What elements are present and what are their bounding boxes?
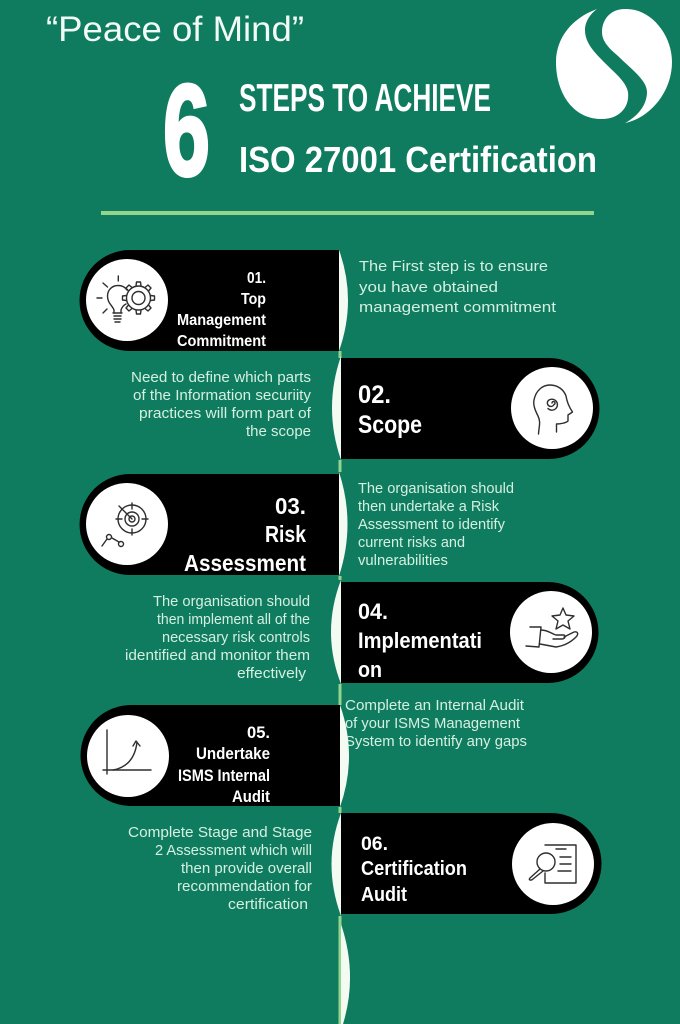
step 5 title: Undertake [196,744,270,763]
title: peace of mind: “Peace of Mind” [46,10,304,49]
heading: steps to achieve: STEPS TO ACHIEVE [239,77,491,120]
step 1 title [177,270,267,350]
icon: head with spiral [534,385,572,434]
step 5 icon badge [87,715,169,797]
step 2 title: 02. [358,381,391,409]
step 4 pill [341,582,598,683]
step 6 title: Audit [361,884,407,906]
step 6 description: recommendation for [177,878,312,895]
icon: lightbulb and gear [97,276,154,322]
step 3 icon badge [86,483,168,565]
step 2 icon badge [511,367,593,449]
step 2 pill [341,358,599,459]
step 4 description: identified and monitor them [125,647,310,664]
step 5 description: of your ISMS Management [345,715,521,732]
step 4 description: The organisation should [153,593,310,610]
step 6 divider lens [332,813,341,916]
step 2 title: Scope [358,411,422,439]
step 2 divider lens [332,356,341,460]
step 3 description: Assessment to identify [358,516,505,533]
step 5 title: 05. [247,723,270,742]
step 1 description: The First step is to ensure [359,258,548,275]
step 6 description [128,824,312,913]
step 6 description: 2 Assessment which will [155,842,312,859]
step 4 description: effectively [237,665,307,682]
step 4 icon badge [510,591,592,673]
step 5 divider lens [340,705,349,807]
icon: target and trend [102,503,148,546]
step 2 title [358,381,422,439]
step 5 title [178,723,270,806]
step 2 description [131,369,312,440]
step 1 icon badge [86,259,168,341]
icon: magnifier over document [529,845,576,883]
step 1 title: 01. [247,270,266,287]
step 3 description: current risks and [358,534,465,551]
heading: ISO 27001 certification: ISO 27001 Certification [239,139,597,180]
step 4 title: Implementati [358,628,482,653]
icon: growth chart [103,730,151,774]
step 4 title: 04. [358,599,388,624]
step 6 title: 06. [361,834,388,855]
step 3 title: Assessment [184,550,306,576]
header divider [101,211,594,215]
icon: hand with star [526,608,578,647]
step 3 divider lens [339,472,348,576]
step 3 pill [80,474,339,575]
step 6 pill [341,813,602,914]
step 4 description [125,593,310,682]
step 2 description: the scope [246,423,311,440]
step 5 pill [80,705,340,806]
step 1 description: you have obtained [359,279,498,296]
step 2 description: of the Information securiity [133,387,311,404]
step 6 icon badge [512,823,594,905]
panel: step 2 [332,356,599,460]
step 5 description: System to identify any gaps [345,733,527,750]
panel: step 1 [80,250,348,351]
step 1 pill [80,250,339,351]
step 3 description: The organisation should [358,480,514,497]
step 3 description [358,480,514,569]
step 1 description [359,258,557,316]
step 3 description: vulnerabilities [358,552,448,569]
logo [556,9,672,123]
step 5 title: ISMS Internal [178,766,270,785]
step 1 divider lens [339,250,348,351]
step 1 title: Management [177,312,267,329]
step 6 description: certification [228,896,308,913]
step 4 divider lens [331,580,341,684]
step 4 title: on [358,657,382,682]
step 1 description: management commitment [359,299,557,316]
step 5 description [345,697,527,750]
step 4 title [358,599,482,682]
bottom timeline lens [341,924,350,1024]
step 4 description: necessary risk controls [162,629,310,646]
panel: step 6 [332,813,602,916]
step 1 title: Top [241,291,266,308]
step 3 title [184,493,307,576]
step 3 title: 03. [275,493,306,519]
step 6 description: Complete Stage and Stage [128,824,312,841]
panel: step 3 [80,472,348,576]
step 6 description: then provide overall [181,860,312,877]
step 1 title: Commitment [177,333,267,350]
step 3 description: then undertake a Risk [358,498,499,515]
step 3 title: Risk [265,521,307,547]
step 4 description: then implement all of the [157,611,310,628]
step 6 title: Certification [361,858,467,880]
step 6 title [361,834,467,906]
step 2 description: practices will form part of [139,405,312,422]
step 2 description: Need to define which parts [131,369,311,386]
panel: step 5 [80,705,349,807]
step 5 title: Audit [232,787,270,806]
timeline stubs [338,351,342,1024]
heading: numeral six: 6 [163,57,210,203]
panel: step 4 [331,580,598,684]
step 5 description: Complete an Internal Audit [345,697,525,714]
